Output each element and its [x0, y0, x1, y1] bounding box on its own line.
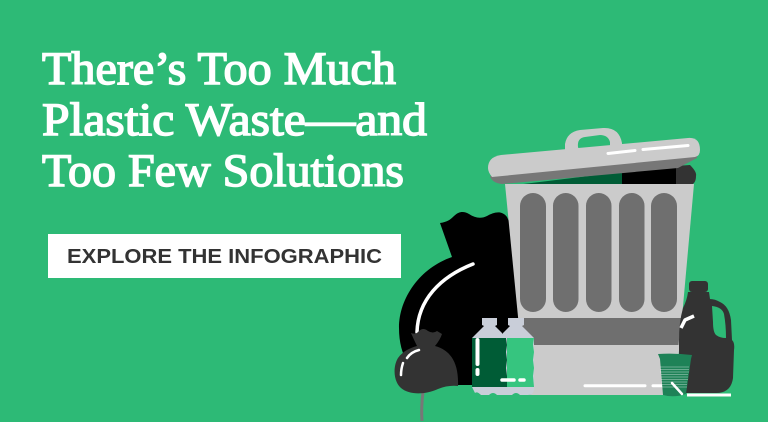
icon: large black garbage bag — [399, 212, 530, 385]
can body — [505, 184, 694, 395]
can slots — [520, 193, 677, 312]
title: Plastic Waste—and — [42, 94, 427, 146]
icon: trash can — [488, 128, 700, 395]
ground line — [687, 394, 731, 396]
title: There’s Too Much — [42, 43, 396, 95]
can highlights — [585, 384, 662, 387]
icon: plastic bottles — [472, 318, 534, 395]
button: explore the infographic: EXPLORE THE INFOGRAPHIC — [67, 246, 382, 268]
contents visible under lid — [515, 165, 696, 185]
title — [42, 43, 427, 197]
button: explore the infographic — [48, 234, 401, 278]
left bottle — [472, 318, 524, 395]
icon: plastic cup — [658, 354, 692, 396]
icon: small dark garbage bag — [395, 329, 458, 421]
lid — [488, 128, 700, 184]
icon: plastic jug — [679, 281, 734, 393]
can band — [519, 318, 681, 345]
right bottle — [503, 318, 534, 395]
title: Too Few Solutions — [42, 145, 404, 197]
